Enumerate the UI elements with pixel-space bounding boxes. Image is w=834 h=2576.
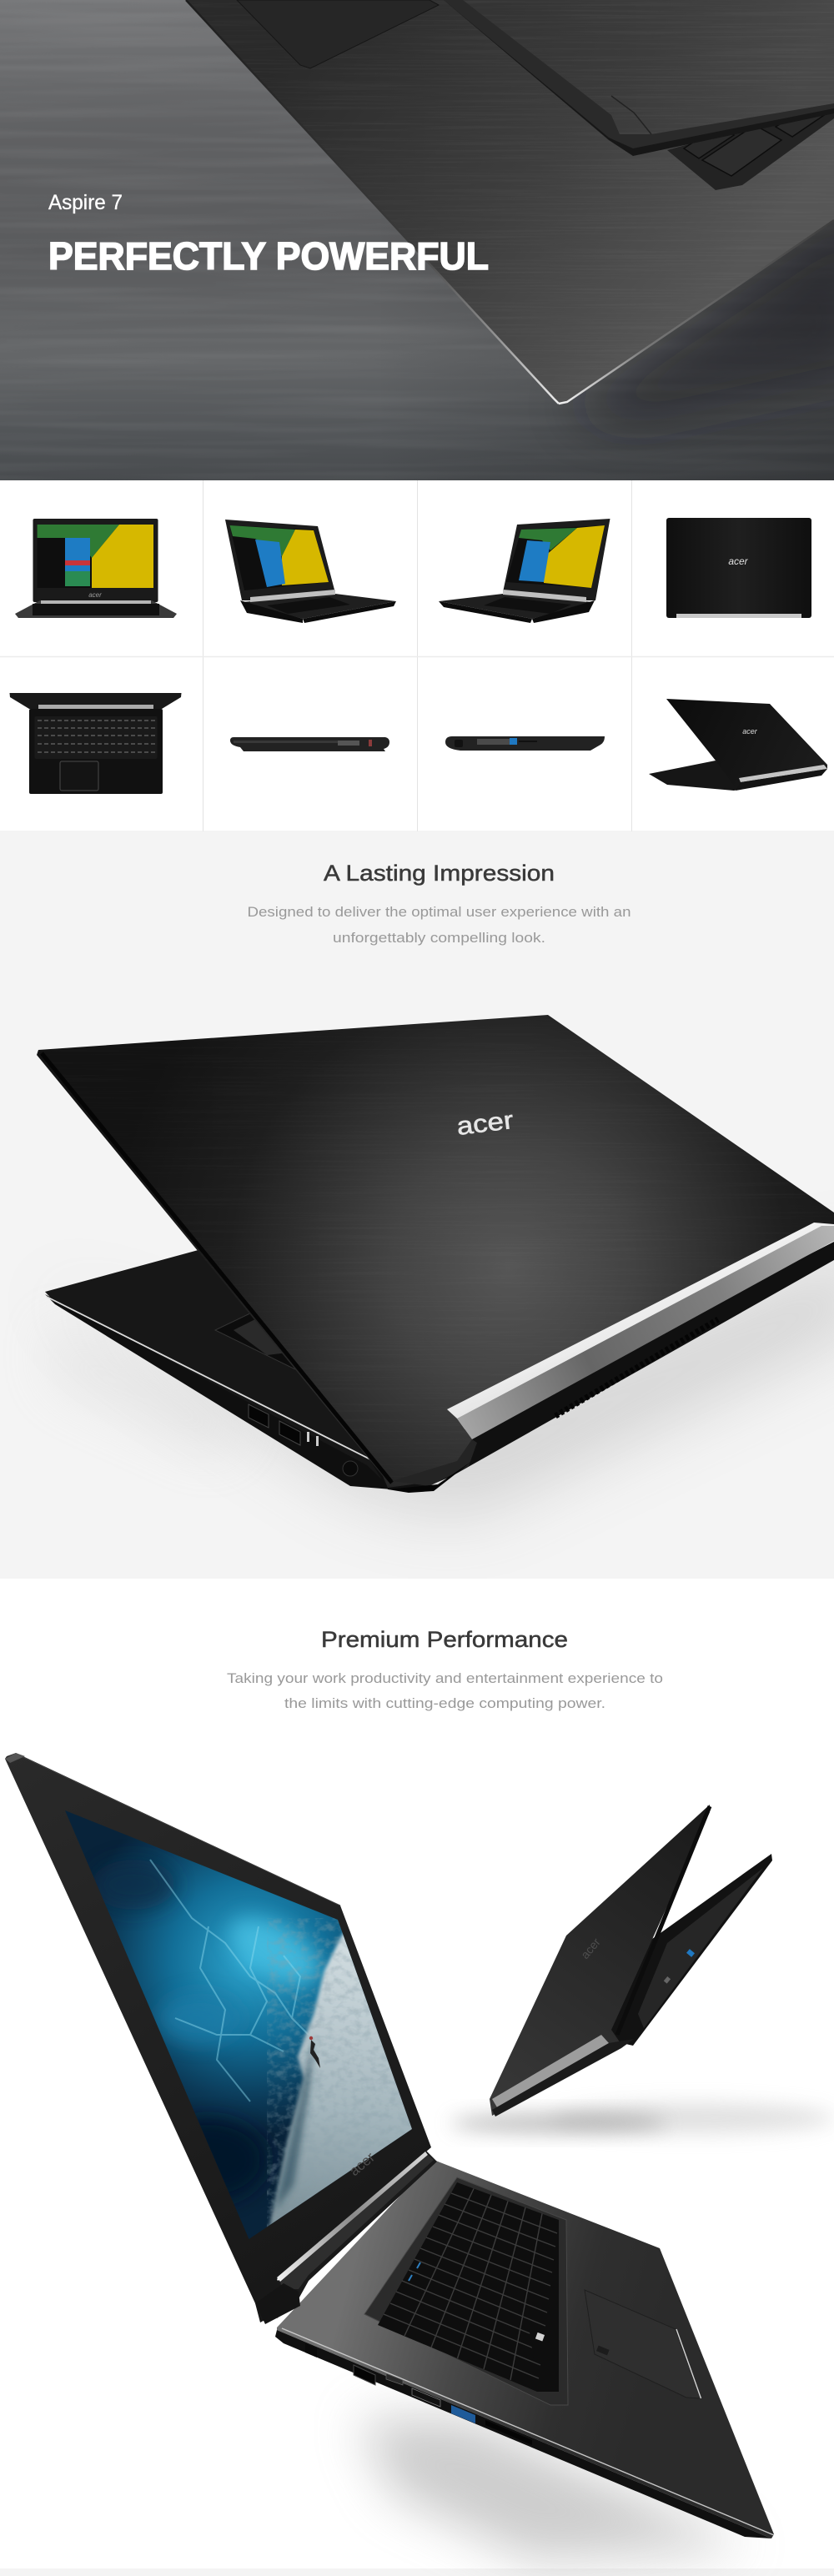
side ports [249, 1404, 358, 1476]
hero keyboard keys [667, 102, 834, 190]
thumbnail: front view [15, 519, 177, 618]
section heading: Premium Performance [321, 1627, 568, 1652]
lid [37, 1015, 834, 1488]
hinge bar [255, 2152, 434, 2324]
hinge backing [277, 2150, 437, 2318]
section description: the limits with cutting-edge computing power. [284, 1695, 605, 1711]
hero brushed metal background [0, 0, 834, 480]
thumbnail: rear angled view: acer [742, 727, 758, 736]
panel: product view gallery [0, 480, 834, 831]
laptop lid [5, 1753, 431, 2322]
section description [247, 904, 631, 946]
gallery grid lines [0, 480, 834, 831]
thumbnail: rear view [666, 518, 811, 618]
thumbnail: rear view: acer [728, 555, 749, 567]
section description: Taking your work productivity and entertainment experience to [227, 1670, 663, 1686]
thumbnail: left side view [230, 737, 389, 751]
hero subtitle: Aspire 7 [48, 191, 123, 214]
section heading: A Lasting Impression [324, 861, 555, 886]
thumbnail: top-down view [10, 693, 182, 794]
panel: a lasting impression [33, 861, 834, 1509]
small laptop shadow [450, 2103, 834, 2133]
section description [227, 1670, 663, 1711]
ventilation grille [555, 1319, 718, 1416]
keyboard [378, 2182, 559, 2392]
hero title: PERFECTLY POWERFUL [48, 234, 489, 278]
section description: unforgettably compelling look. [333, 930, 545, 946]
section description: Designed to deliver the optimal user experience with an [247, 904, 631, 920]
lid acer logo: acer [346, 2149, 378, 2179]
laptop shadow [33, 1251, 834, 1509]
hero laptop lid [444, 0, 834, 156]
thumbnail: right side view [445, 736, 605, 751]
panel: hero banner [0, 0, 834, 480]
hero laptop touchpad [237, 0, 439, 68]
laptop closed rear view [33, 1013, 834, 1493]
thumbnail: rear angled view [649, 699, 827, 791]
hero laptop base [167, 0, 834, 409]
thumbnail: front view: acer [88, 591, 102, 599]
small floating laptop: acer [578, 1936, 603, 1961]
small floating laptop [490, 1805, 772, 2117]
large open laptop [5, 1753, 774, 2538]
large laptop shadow [359, 2418, 751, 2560]
thumbnail: three-quarter right view [439, 519, 610, 623]
laptop base deck [275, 2160, 774, 2538]
acer logo: acer [455, 1107, 515, 1141]
screen: blue ice wallpaper [65, 1810, 417, 2243]
hinge silver strip [457, 1226, 834, 1439]
thumbnail: three-quarter left view [225, 520, 396, 623]
touchpad [585, 2290, 701, 2398]
keyboard well [364, 2177, 568, 2405]
panel: premium performance [5, 1627, 834, 2560]
base deck [45, 1248, 392, 1489]
side ports [305, 2343, 532, 2445]
base front edge [275, 2330, 771, 2538]
rear body edge [367, 1242, 834, 1489]
